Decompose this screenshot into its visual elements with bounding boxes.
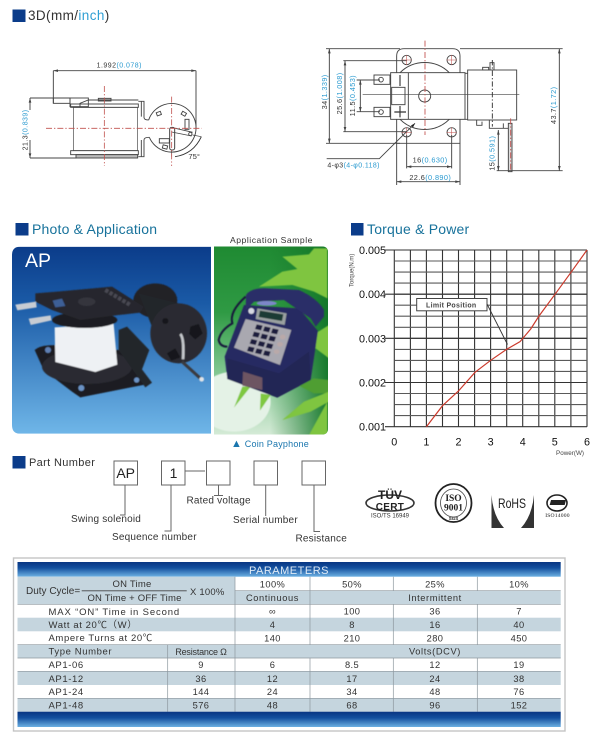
label: serial number: Serial number bbox=[233, 515, 298, 526]
photo: solenoid bbox=[15, 283, 207, 397]
row labels: AP1-06 bbox=[48, 660, 84, 671]
heading: 3D dimensions: 3D(mm/inch) bbox=[28, 8, 110, 23]
logo: ISO 9001: SGS bbox=[449, 516, 458, 521]
y axis labels: 0.005 bbox=[359, 245, 386, 257]
table cells: ∞ bbox=[269, 606, 276, 616]
table cells: 6 bbox=[270, 660, 275, 670]
row labels: MAX “ON” Time in Second bbox=[48, 607, 180, 618]
table cells: 25% bbox=[425, 580, 445, 590]
table cells: 140 bbox=[264, 634, 281, 644]
table cells: 34 bbox=[346, 687, 358, 697]
code: AP: AP bbox=[116, 465, 135, 481]
table cells: 76 bbox=[513, 687, 525, 697]
table cells: 16 bbox=[429, 620, 441, 630]
table cells: 450 bbox=[511, 634, 527, 644]
table title bar: PARAMETERS bbox=[249, 565, 329, 577]
logo: TUV CERT: TÜV bbox=[378, 487, 402, 502]
product name: AP bbox=[25, 250, 51, 272]
table cells: 12 bbox=[429, 660, 441, 670]
label: plate width: 22.6(0.890) bbox=[409, 173, 451, 182]
table cells: 4 bbox=[270, 620, 275, 630]
diagram: side view of solenoid bbox=[22, 62, 202, 166]
row shading bbox=[18, 577, 561, 712]
table cells: 100 bbox=[344, 606, 360, 616]
logo: ISO 9001: ISO bbox=[445, 494, 462, 504]
logo: ISO 14000 bbox=[545, 495, 570, 519]
label: swing solenoid: Swing solenoid bbox=[71, 514, 141, 525]
table cells: 9 bbox=[198, 660, 204, 670]
heading: torque and power: Torque & Power bbox=[367, 221, 470, 237]
x axis labels: 5 bbox=[552, 436, 558, 448]
x axis labels: 3 bbox=[488, 436, 494, 448]
caption: coin payphone: ▲ Coin Payphone bbox=[231, 438, 309, 450]
callout: limit position bbox=[417, 298, 508, 344]
label: width dimension: 1.992(0.078) bbox=[97, 62, 142, 69]
logo: ISO 14000: ISO14000 bbox=[545, 513, 570, 519]
label: mounting holes: 4-φ3(4-φ0.118) bbox=[327, 162, 380, 169]
row labels: AP1-12 bbox=[48, 674, 84, 685]
label: hole spacing height: 25.6(1.008) bbox=[335, 72, 344, 114]
table cells: 17 bbox=[346, 674, 358, 684]
table cells: 144 bbox=[193, 687, 209, 697]
table cells: 38 bbox=[513, 674, 525, 684]
row labels: AP1-48 bbox=[48, 700, 84, 712]
logo: RoHS: RoHS bbox=[498, 495, 526, 511]
table cells: 576 bbox=[193, 700, 209, 710]
table cells: 48 bbox=[429, 687, 441, 697]
table cells: 19 bbox=[513, 660, 525, 670]
diagram: front and end view of solenoid bbox=[320, 41, 563, 185]
row labels: AP1-24 bbox=[48, 687, 84, 698]
table cells: 8 bbox=[349, 620, 355, 630]
x axis labels: 2 bbox=[455, 436, 462, 448]
table cells: 100% bbox=[260, 580, 285, 590]
panel: application photo bbox=[214, 246, 328, 434]
x axis title: Power(W) bbox=[556, 450, 584, 457]
label: rated voltage: Rated voltage bbox=[186, 496, 251, 506]
table cells: 280 bbox=[427, 634, 443, 644]
table cells: Resistance Ω bbox=[175, 647, 227, 657]
y axis labels: 0.003 bbox=[359, 333, 386, 345]
logo: TUV CERT: ISO/TS 16949 bbox=[371, 514, 410, 520]
logo: ISO 9001 bbox=[436, 484, 472, 522]
table cells: 50% bbox=[342, 580, 362, 590]
table title bar bbox=[18, 562, 561, 577]
label: sequence number: Sequence number bbox=[112, 532, 197, 543]
logo: TUV CERT: CERT bbox=[376, 502, 404, 513]
logo: TUV CERT bbox=[366, 487, 414, 520]
table cells: 48 bbox=[267, 700, 278, 710]
label: height dimension: 21.3(0.839) bbox=[22, 109, 29, 150]
caption: application sample: Application Sample bbox=[230, 235, 313, 245]
table footer bar bbox=[18, 712, 561, 727]
x axis labels: 6 bbox=[584, 436, 590, 448]
heading: part number: Part Number bbox=[29, 457, 95, 469]
row labels: Type Number bbox=[48, 646, 112, 658]
panel: product photo bbox=[12, 247, 211, 434]
duty cycle formula: ON Time bbox=[113, 579, 151, 590]
label: total height: 43.7(1.72) bbox=[549, 87, 558, 124]
label: hole spacing width: 16(0.630) bbox=[413, 155, 448, 164]
table cells: 24 bbox=[429, 674, 441, 684]
label: resistance: Resistance bbox=[296, 534, 347, 544]
table cells: 8.5 bbox=[345, 660, 359, 670]
x axis labels: 1 bbox=[423, 436, 429, 448]
y axis title: Torque(N.m) bbox=[350, 254, 356, 287]
x axis labels bbox=[391, 436, 590, 448]
duty cycle formula: Duty Cycle= bbox=[26, 586, 80, 597]
table cells: 68 bbox=[346, 700, 358, 710]
panel: parameters table bbox=[14, 558, 565, 731]
y axis labels bbox=[359, 245, 386, 434]
data line bbox=[426, 250, 587, 427]
row labels bbox=[48, 607, 180, 712]
x axis labels: 0 bbox=[391, 436, 397, 448]
table cells: 40 bbox=[513, 620, 525, 630]
table cells: 96 bbox=[429, 700, 441, 710]
label: pin length: 15(0.591) bbox=[488, 136, 497, 171]
callout: limit position: Limit Position bbox=[426, 302, 476, 310]
table cells: Volts(DCV) bbox=[409, 646, 461, 656]
y axis labels: 0.001 bbox=[359, 422, 386, 434]
heading: photo and application: Photo & Application bbox=[32, 221, 157, 237]
table cells: 36 bbox=[429, 606, 441, 616]
label: angle: 75° bbox=[188, 152, 200, 161]
y axis labels: 0.002 bbox=[359, 378, 386, 390]
duty cycle formula: ON Time + OFF Time bbox=[87, 593, 182, 604]
table cells: 152 bbox=[511, 700, 527, 710]
logo: RoHS bbox=[492, 495, 534, 528]
photo: leaves and payphone bbox=[214, 248, 328, 434]
line chart: torque vs power bbox=[350, 245, 590, 457]
duty cycle formula: X 100% bbox=[190, 587, 225, 598]
table cells: 210 bbox=[344, 634, 360, 644]
table cells: 36 bbox=[195, 674, 207, 684]
code: 1: 1 bbox=[170, 465, 178, 481]
table cells: 12 bbox=[267, 674, 278, 684]
label: overall plate height: 34(1.339) bbox=[320, 74, 329, 109]
y axis labels: 0.004 bbox=[359, 289, 386, 301]
table cells: 7 bbox=[516, 606, 522, 616]
row labels: Ampere Turns at 20℃ bbox=[48, 633, 153, 644]
logo: ISO 9001: 9001 bbox=[444, 504, 463, 514]
label: terminal spacing: 11.5(0.453) bbox=[348, 75, 357, 116]
x axis labels: 4 bbox=[520, 436, 526, 448]
duty cycle formula bbox=[26, 579, 225, 604]
row labels: Watt at 20℃（W） bbox=[48, 619, 137, 631]
diagram: part number breakdown bbox=[71, 461, 347, 544]
table cells: Continuous bbox=[246, 593, 299, 603]
table cells bbox=[175, 580, 529, 710]
table cells: 10% bbox=[509, 580, 529, 590]
table cells: 24 bbox=[267, 687, 278, 697]
table cells: Intermittent bbox=[408, 593, 462, 603]
